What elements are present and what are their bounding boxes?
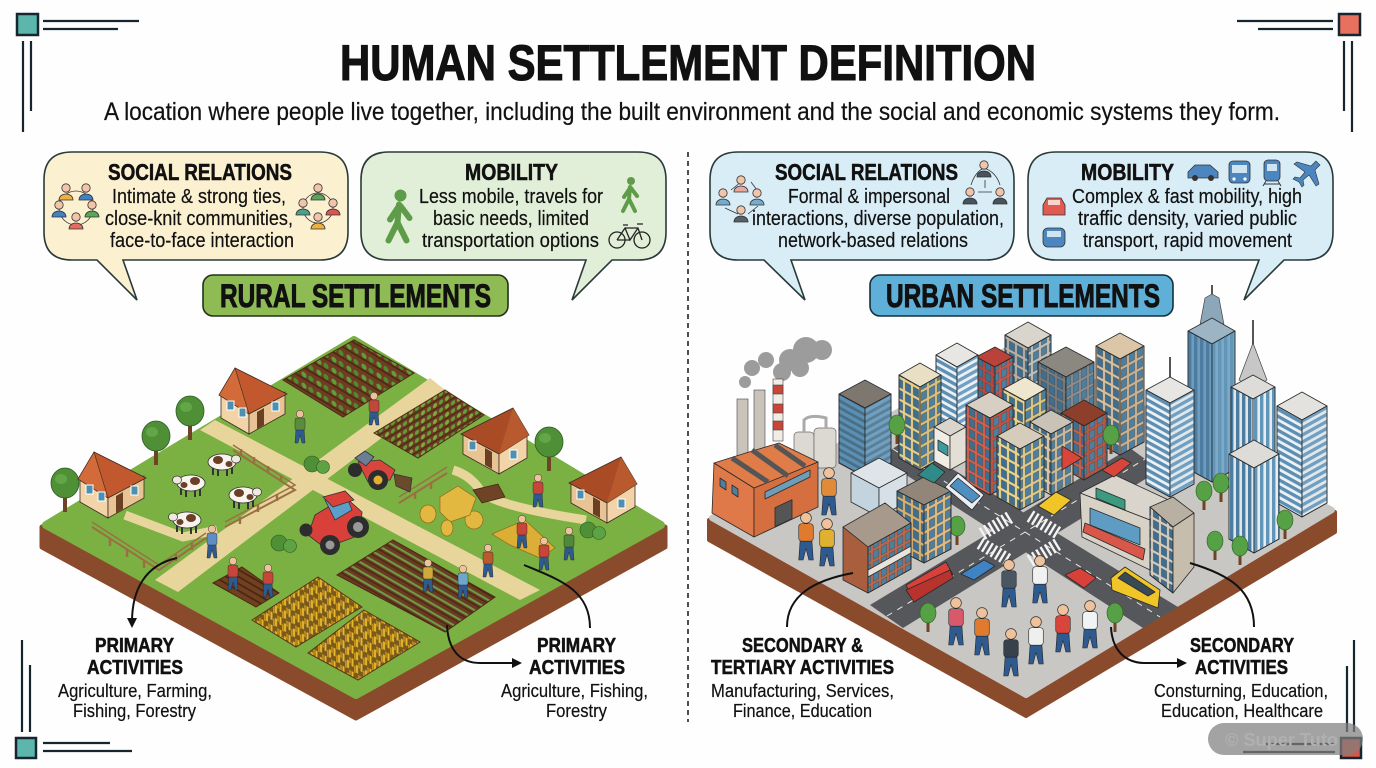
trees bbox=[889, 415, 1293, 632]
arrow: rural right leader bbox=[524, 565, 590, 628]
panel: urban social relations bubble: SOCIAL RELATIONS bbox=[775, 159, 958, 185]
dirt paths bbox=[125, 378, 586, 600]
text block: rural primary activities left bbox=[58, 634, 212, 721]
arrow: urban right leader bbox=[1190, 563, 1254, 627]
vehicles bbox=[906, 458, 1160, 608]
text block: urban secondary activities bbox=[1154, 634, 1328, 721]
arrow: urban left leader bbox=[787, 573, 853, 627]
label: urban settlements bbox=[870, 275, 1173, 316]
crop field: top bbox=[283, 340, 414, 417]
smoke bbox=[739, 337, 832, 388]
soil base bbox=[709, 512, 1335, 716]
text block: rural primary activities left: ACTIVITIES bbox=[87, 656, 183, 679]
text block: urban secondary and tertiary activities: Manufacturing, Services, bbox=[711, 681, 894, 701]
label: rural settlements bbox=[203, 275, 508, 316]
trees bbox=[51, 396, 563, 512]
panel: rural mobility bubble bbox=[361, 152, 666, 300]
bushes bbox=[271, 456, 606, 552]
corner ornament: top left bbox=[17, 14, 139, 132]
arrow: urban right callout bbox=[1111, 627, 1187, 668]
panel: rural mobility bubble: basic needs, limited bbox=[433, 208, 589, 230]
text block: rural primary activities right: Forestry bbox=[546, 701, 607, 721]
text block: urban secondary activities: Consturning, Education, bbox=[1154, 681, 1328, 701]
illustration: urban isometric city bbox=[709, 285, 1335, 716]
panel: rural social relations bubble: Intimate & strong ties, bbox=[112, 186, 286, 208]
title: HUMAN SETTLEMENT DEFINITION bbox=[340, 35, 1036, 91]
workers and professionals bbox=[799, 468, 1097, 676]
storage tanks bbox=[794, 416, 836, 468]
center divider bbox=[687, 152, 689, 722]
corner ornament: bottom left bbox=[16, 640, 132, 758]
icon: plane bbox=[1293, 161, 1320, 187]
panel: urban social relations bubble bbox=[710, 152, 1014, 300]
panel: rural social relations bubble bbox=[44, 152, 348, 300]
panel: rural social relations bubble: SOCIAL RELATIONS bbox=[108, 159, 292, 185]
panel: urban social relations bubble: interactions, diverse population, bbox=[752, 208, 1004, 230]
icon: professional network right bbox=[963, 161, 1007, 204]
icon: blue van bbox=[1043, 228, 1065, 247]
icon: small walker bbox=[623, 177, 637, 211]
factory bbox=[712, 443, 818, 537]
arrow: rural left callout bbox=[127, 558, 177, 628]
label: urban settlements: URBAN SETTLEMENTS bbox=[886, 278, 1160, 314]
panel: rural mobility bubble: Less mobile, travels for bbox=[419, 186, 603, 208]
glass and skyscraper towers bbox=[839, 318, 1327, 553]
icon: red car bbox=[1043, 198, 1065, 215]
cows bbox=[168, 454, 262, 534]
icon: community ring left bbox=[52, 184, 99, 229]
text block: rural primary activities left: Fishing, Forestry bbox=[73, 701, 196, 721]
panel: urban mobility bubble bbox=[1028, 152, 1333, 300]
panel: urban mobility bubble: Complex & fast mobility, high bbox=[1072, 186, 1302, 208]
text block: rural primary activities right bbox=[501, 634, 648, 721]
panel: rural social relations bubble: close-knit communities, bbox=[105, 208, 293, 230]
text block: urban secondary activities: ACTIVITIES bbox=[1195, 656, 1288, 679]
text block: urban secondary and tertiary activities bbox=[711, 634, 894, 721]
front buildings bbox=[843, 458, 1194, 593]
panel: rural mobility bubble: MOBILITY bbox=[465, 159, 558, 185]
text block: urban secondary and tertiary activities: SECONDARY & bbox=[742, 634, 863, 657]
panel: urban social relations bubble: Formal & impersonal bbox=[788, 186, 950, 208]
panel: urban mobility bubble: traffic density, varied public bbox=[1078, 208, 1297, 230]
text block: rural primary activities left: PRIMARY bbox=[95, 634, 174, 657]
arrow: rural right callout bbox=[447, 625, 522, 668]
icon: professional network left bbox=[716, 176, 764, 222]
fences bbox=[92, 445, 447, 570]
roads bbox=[870, 440, 1178, 628]
wheat plot 1 bbox=[252, 577, 362, 647]
panel: rural mobility bubble: transportation options bbox=[422, 230, 599, 252]
soil base bbox=[42, 527, 665, 718]
text block: rural primary activities left: Agriculture, Farming, bbox=[58, 681, 212, 701]
illustration: rural isometric landscape bbox=[42, 340, 665, 718]
text block: rural primary activities right: PRIMARY bbox=[537, 634, 616, 657]
watermark: © Super Tuto bbox=[1225, 730, 1338, 750]
text block: urban secondary activities: SECONDARY bbox=[1190, 634, 1294, 657]
plowed plot bbox=[213, 567, 279, 607]
skyscraper spires bbox=[1170, 285, 1267, 388]
text block: urban secondary and tertiary activities: Finance, Education bbox=[733, 701, 872, 721]
corner ornament: top right bbox=[1237, 14, 1360, 132]
panel: rural social relations bubble: face-to-face interaction bbox=[110, 230, 294, 252]
red tractor bbox=[300, 491, 369, 555]
houses bbox=[78, 368, 637, 523]
corner ornament: bottom right bbox=[1243, 640, 1361, 758]
text block: rural primary activities right: Agriculture, Fishing, bbox=[501, 681, 648, 701]
panel: urban social relations bubble: network-based relations bbox=[778, 230, 968, 252]
text block: rural primary activities right: ACTIVITIES bbox=[529, 656, 625, 679]
icon: train bbox=[1263, 160, 1281, 186]
crop field: right bbox=[374, 390, 484, 458]
text block: urban secondary activities: Education, Healthcare bbox=[1161, 701, 1323, 721]
pavement top bbox=[712, 342, 1332, 695]
label: rural settlements: RURAL SETTLEMENTS bbox=[220, 278, 491, 314]
grass top bbox=[46, 340, 661, 695]
icon: bus bbox=[1229, 161, 1250, 183]
panel: urban mobility bubble: MOBILITY bbox=[1081, 159, 1174, 185]
icon: bicycle bbox=[609, 224, 650, 248]
text block: urban secondary and tertiary activities: TERTIARY ACTIVITIES bbox=[711, 656, 894, 679]
icon: car bbox=[1188, 165, 1218, 181]
small tractor with loader bbox=[348, 451, 412, 492]
farmers bbox=[207, 392, 574, 598]
icon: large walker bbox=[388, 190, 410, 240]
wheat plot 2 bbox=[308, 610, 420, 680]
back buildings bbox=[899, 322, 1144, 510]
panel: urban mobility bubble: transport, rapid movement bbox=[1083, 230, 1292, 252]
chimneys bbox=[737, 379, 783, 459]
hay bales and logs bbox=[420, 484, 555, 558]
row crop field bbox=[337, 540, 495, 632]
subtitle: A location where people live together, including the built environment and the social and economic systems they form. bbox=[104, 98, 1280, 126]
icon: community ring right bbox=[296, 184, 340, 229]
watermark bbox=[1208, 723, 1363, 755]
